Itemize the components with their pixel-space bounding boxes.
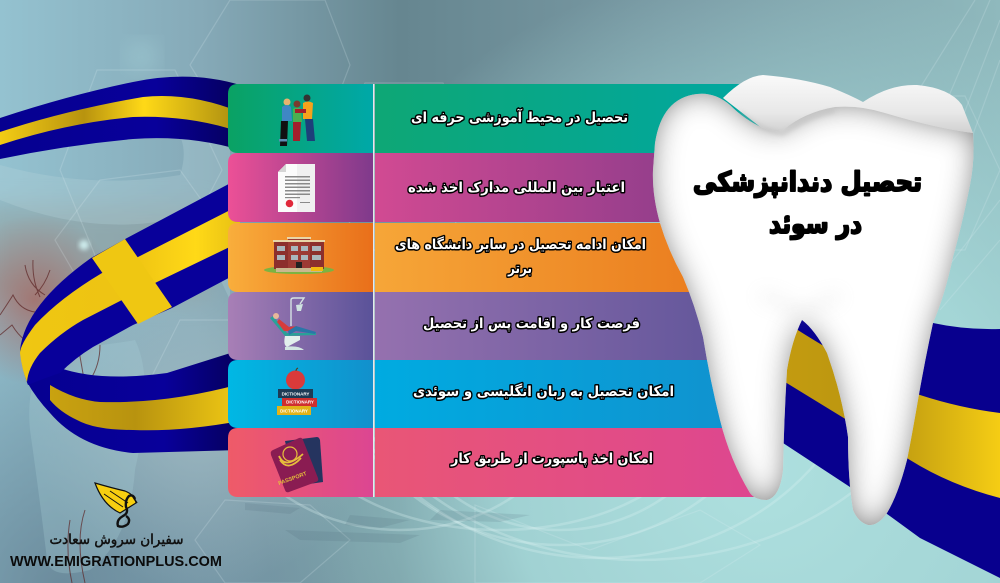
icon: apple on dictionaries: DICTIONARY (286, 400, 314, 404)
Swedish flag ribbon: lower band (24, 350, 240, 453)
row 5: English and Swedish (228, 360, 765, 428)
icon: three students (279, 94, 315, 146)
panel: benefits list (228, 84, 765, 497)
Swedish flag ribbon: right side (783, 310, 1000, 578)
Swedish flag ribbon: top band (0, 77, 240, 159)
row 3: continue at top universities (228, 223, 765, 292)
icon: certificate document (278, 164, 315, 212)
text: row 6: امکان اخذ پاسپورت از طریق کار (450, 451, 653, 467)
logo (10, 483, 222, 570)
icon: passports (271, 437, 323, 492)
row 6: passport through work (228, 428, 765, 497)
icon: winged S emblem (95, 483, 137, 527)
title: در سوئد (769, 209, 862, 240)
icon: dental chair (270, 298, 316, 350)
row 3: continue at top universities: برتر (507, 261, 532, 277)
title (693, 167, 922, 240)
Swedish flag ribbon: middle band with cross (20, 178, 240, 385)
tooth illustration (653, 75, 974, 525)
text: company name: سفیران سروش سعادت (50, 532, 184, 548)
row 1: professional education environment (228, 84, 765, 153)
icon: university building (264, 237, 334, 274)
text: row 1: تحصیل در محیط آموزشی حرفه ای (411, 108, 628, 126)
row 4: work and residence (228, 292, 765, 360)
text: row 5: امکان تحصیل به زبان انگلیسی و سوئدی (413, 383, 674, 400)
icon: apple on dictionaries: DICTIONARY (280, 408, 308, 414)
row 2: international accreditation (228, 153, 765, 222)
text: row 2: اعتبار بین المللی مدارک اخذ شده (408, 180, 625, 196)
title: تحصیل دندانپزشکی (693, 167, 922, 198)
text: row 3: امکان ادامه تحصیل در سایر دانشگاه های (395, 236, 646, 253)
text: website url: WWW.EMIGRATIONPLUS.COM (10, 553, 222, 570)
icon: passports: PASSPORT (278, 471, 308, 487)
text: row 4: فرصت کار و اقامت پس از تحصیل (423, 316, 640, 332)
icon: apple on dictionaries: DICTIONARY (282, 392, 309, 396)
icon: apple on dictionaries (277, 368, 317, 415)
